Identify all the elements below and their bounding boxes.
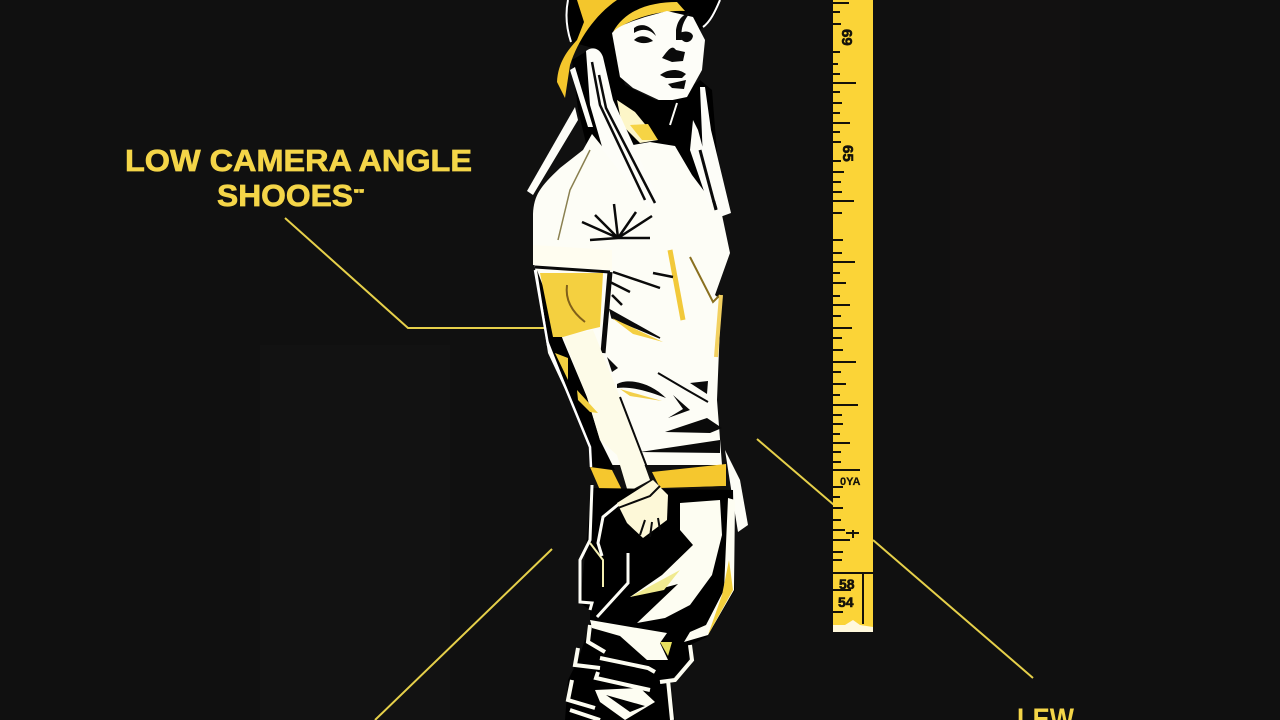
ruler numerals: 0YA: [840, 476, 860, 488]
belt: [590, 464, 726, 498]
face: [612, 11, 705, 102]
heading: low camera angle shoes: ": [353, 187, 365, 201]
callout leader line: top left: [285, 218, 546, 328]
hip strap: [725, 450, 748, 532]
figure: man standing in profile: [527, 0, 748, 720]
ruler: [833, 0, 873, 632]
callout leader line: bottom left: [375, 549, 552, 720]
neck: [617, 100, 658, 143]
ruler numerals: [838, 29, 860, 610]
sleeve band: [533, 245, 612, 272]
hand: [617, 480, 668, 538]
callout leader line: right: [757, 439, 1033, 678]
ruler numerals: 69: [838, 29, 855, 46]
heading: low camera angle shoes: [125, 143, 472, 213]
heading: low camera angle shoes: SHOOES: [217, 178, 353, 213]
hat: [557, 0, 720, 98]
ruler numerals: 65: [839, 145, 856, 162]
pants: [565, 485, 735, 720]
arm: [535, 270, 650, 492]
hair back mass: [572, 36, 722, 215]
heading: low camera angle shoes: LOW CAMERA ANGLE: [125, 143, 472, 178]
torso shirt: [533, 134, 730, 465]
ruler numerals: 58: [839, 576, 855, 592]
dreadlocks: [527, 48, 731, 217]
ruler numerals: 54: [838, 594, 854, 610]
